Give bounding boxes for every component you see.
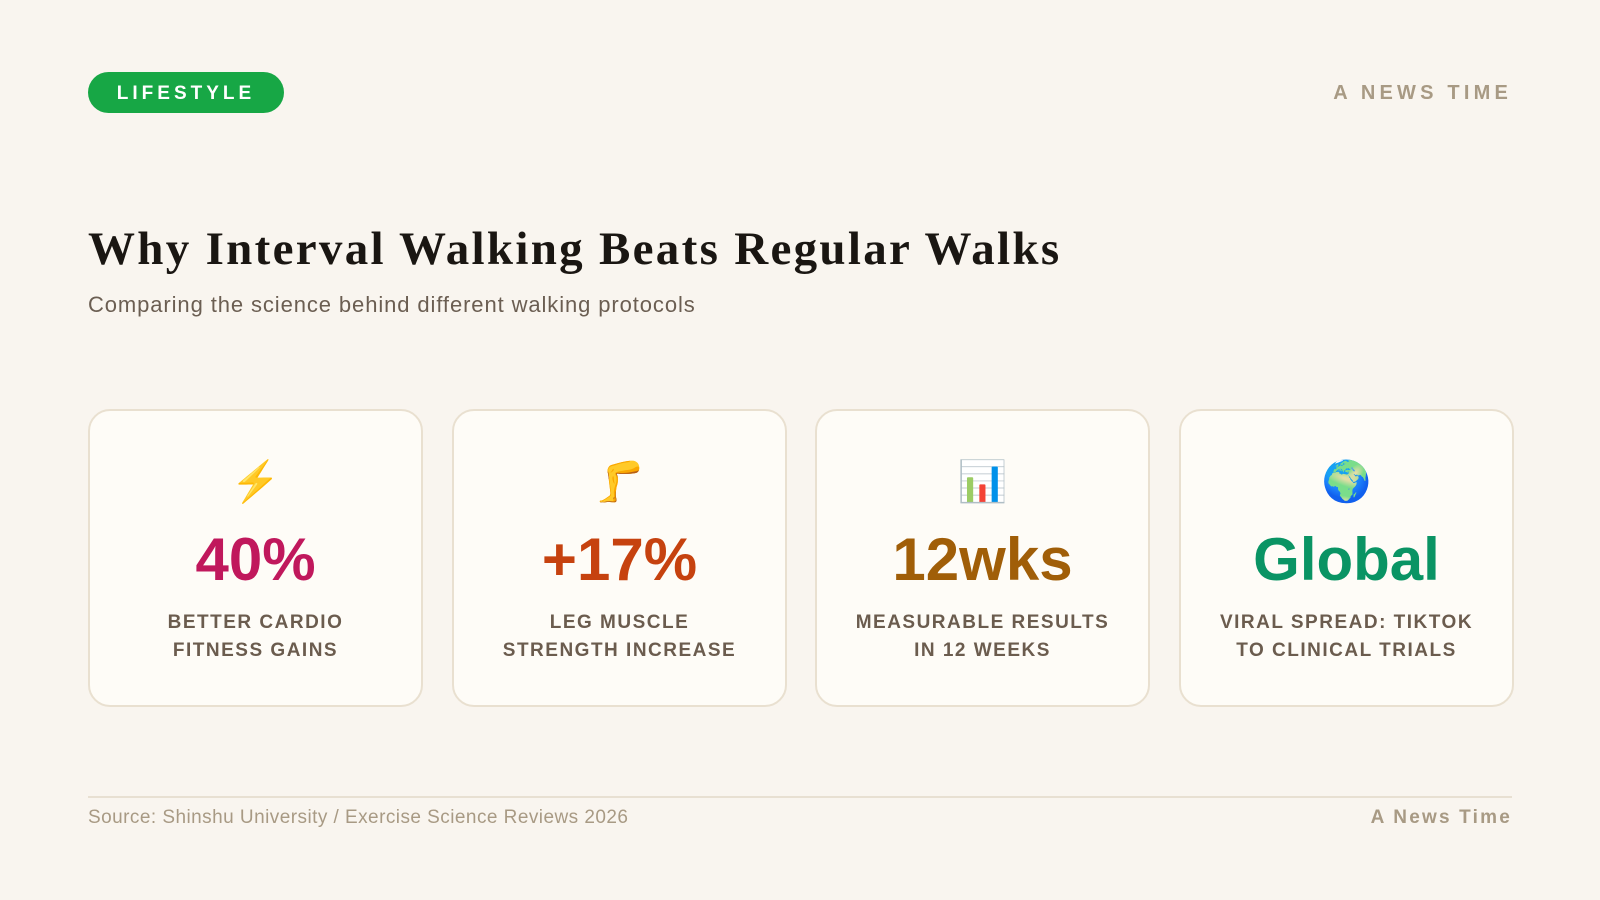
label: global: VIRAL SPREAD: TIKTOK bbox=[1220, 612, 1473, 633]
panel: 12 weeks bbox=[815, 409, 1150, 707]
icon: leg: 🦵 bbox=[595, 460, 644, 504]
stat: 40%: 40% bbox=[195, 526, 316, 593]
label: leg: STRENGTH INCREASE bbox=[503, 640, 736, 661]
category pill bbox=[88, 72, 284, 113]
label: weeks: MEASURABLE RESULTS bbox=[856, 612, 1109, 633]
panel: cardio bbox=[88, 409, 423, 707]
icon: bar chart: 📊 bbox=[958, 460, 1007, 504]
label: global: TO CLINICAL TRIALS bbox=[1236, 640, 1457, 661]
title: Why Interval Walking Beats Regular Walks bbox=[88, 223, 1061, 275]
label: cardio: BETTER CARDIO bbox=[168, 612, 343, 633]
category pill: LIFESTYLE bbox=[117, 83, 255, 104]
panel: leg muscle bbox=[452, 409, 787, 707]
label: cardio bbox=[168, 612, 343, 661]
source note: Source: Shinshu University / Exercise Science Reviews 2026 bbox=[88, 807, 628, 828]
label: global bbox=[1220, 612, 1473, 661]
stat: 12wks: 12wks bbox=[892, 526, 1073, 593]
brand header: A NEWS TIME bbox=[1333, 82, 1512, 104]
panel: global bbox=[1179, 409, 1514, 707]
label: weeks bbox=[856, 612, 1109, 661]
footer brand: A News Time bbox=[1371, 807, 1512, 828]
icon: lightning: ⚡ bbox=[231, 460, 280, 504]
label: cardio: FITNESS GAINS bbox=[173, 640, 338, 661]
stat: +17%: +17% bbox=[542, 526, 697, 593]
label: leg bbox=[503, 612, 736, 661]
stat: Global: Global bbox=[1253, 526, 1440, 593]
label: weeks: IN 12 WEEKS bbox=[914, 640, 1051, 661]
icon: globe: 🌍 bbox=[1322, 460, 1371, 504]
subtitle: Comparing the science behind different walking protocols bbox=[88, 292, 696, 317]
label: leg: LEG MUSCLE bbox=[550, 612, 689, 633]
